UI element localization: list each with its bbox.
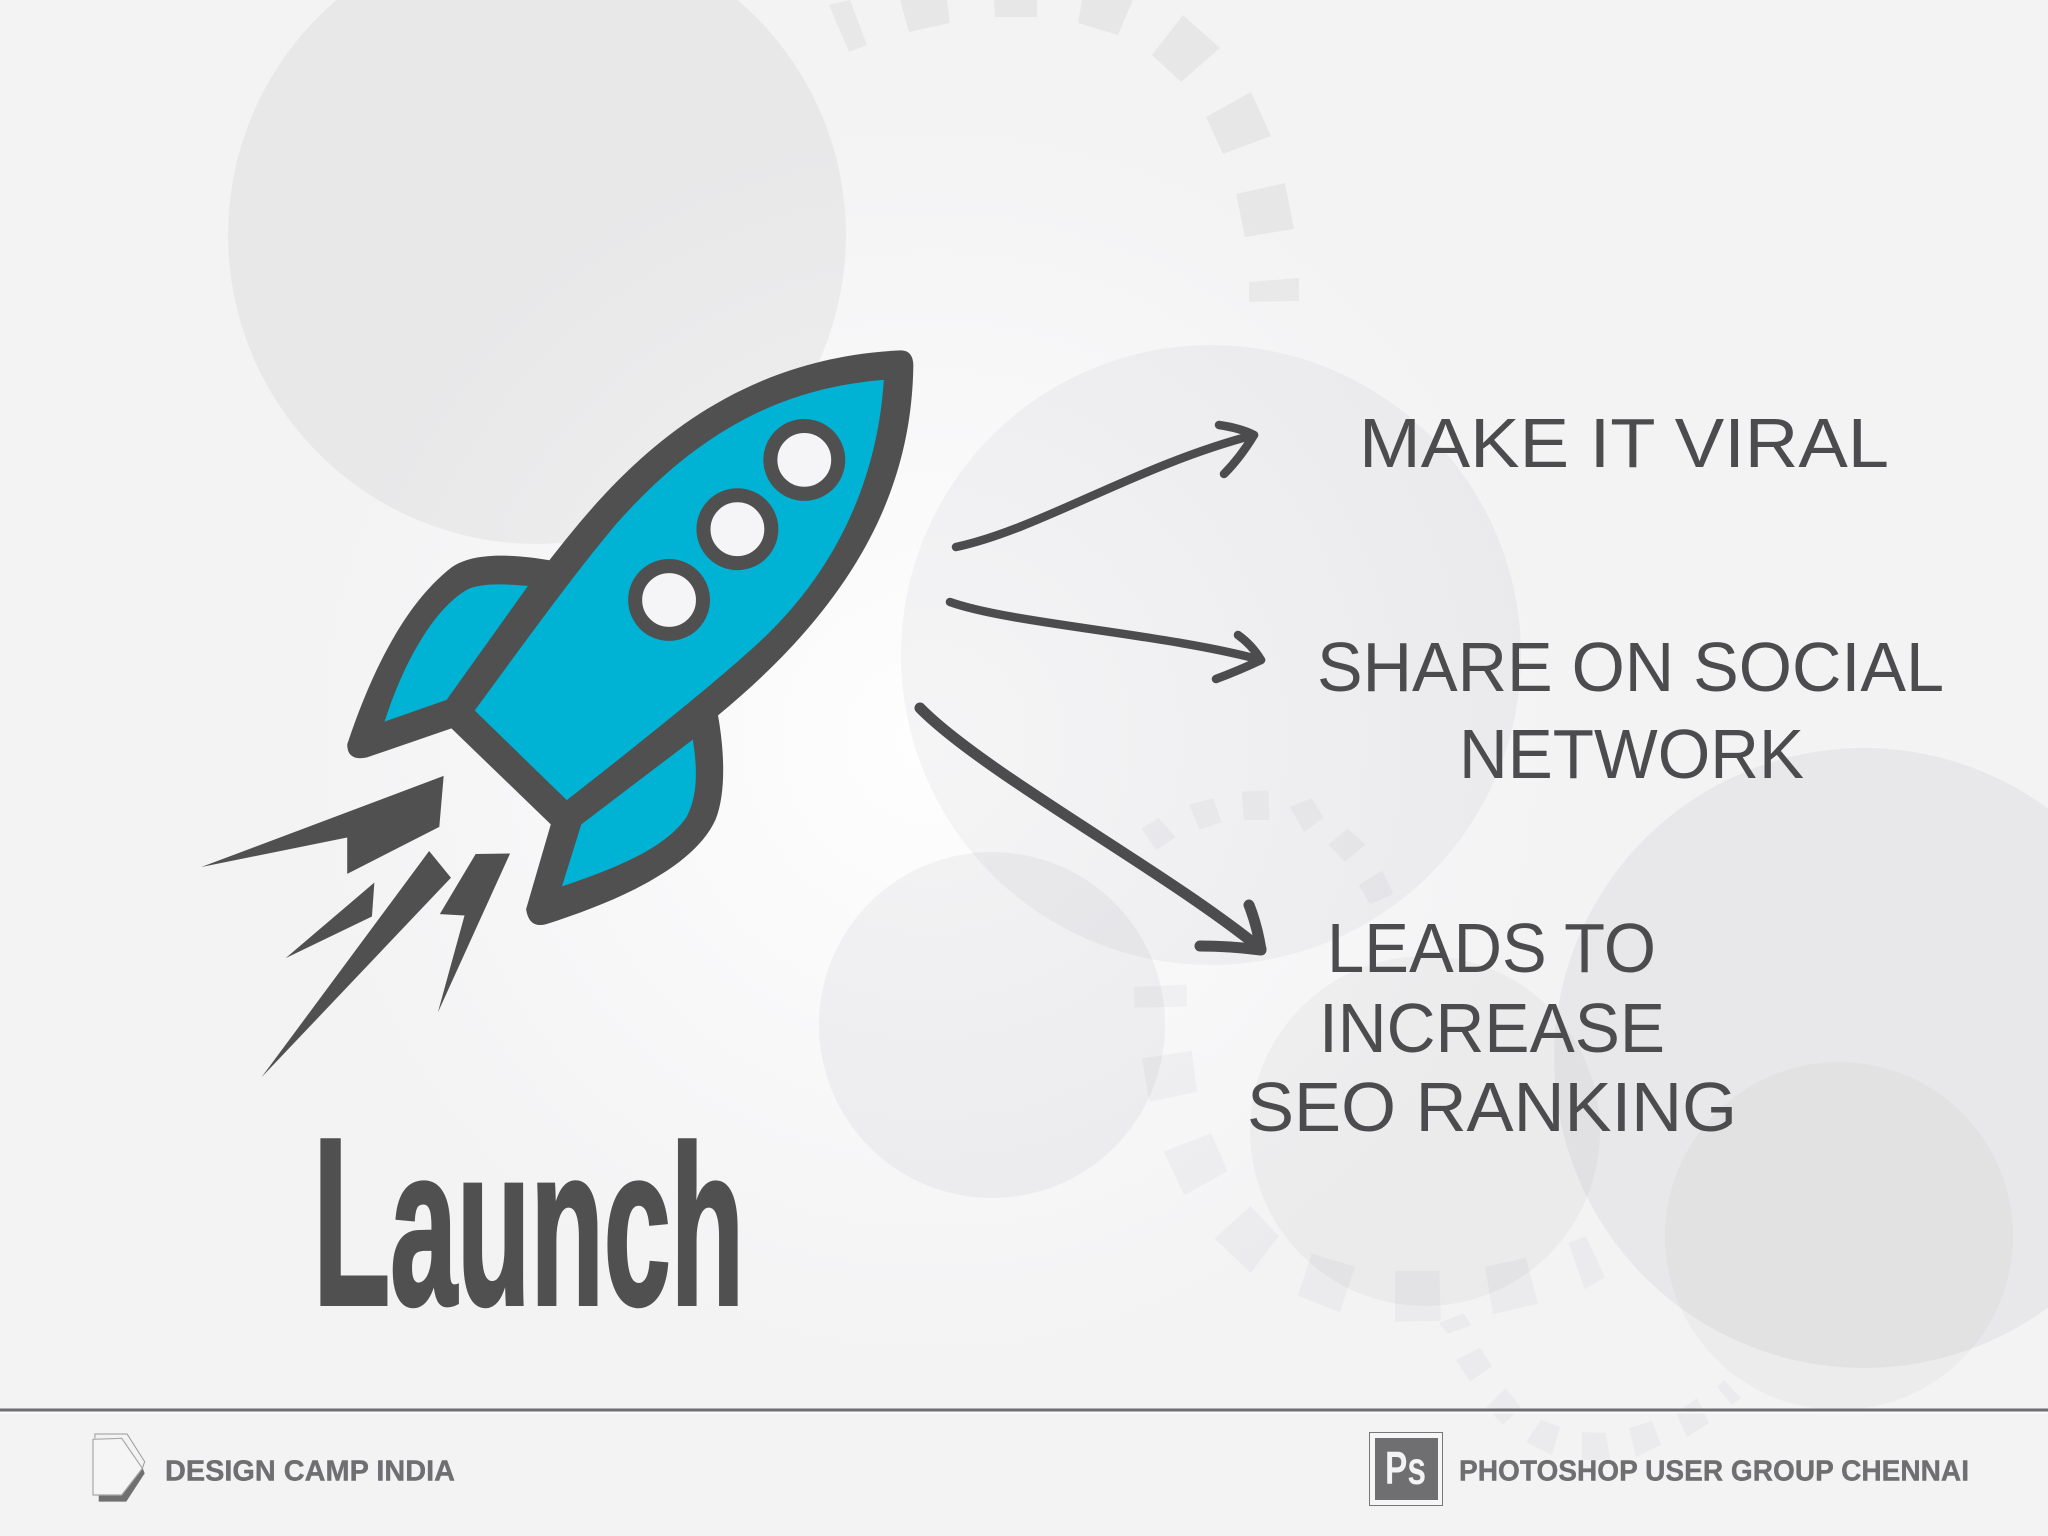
text: leads to increase seo ranking: SEO RANKING [1247,1068,1737,1146]
text: leads to increase seo ranking: INCREASE [1319,989,1665,1067]
rocket body [475,380,884,800]
top dotted ring [829,0,1299,302]
left fin [385,584,528,722]
text: share on social network: NETWORK [1459,715,1804,793]
rocket flames [201,776,510,1077]
rocket windows [635,426,838,634]
footer text: design camp india: DESIGN CAMP INDIA [165,1456,455,1488]
footer text: photoshop user group chennai: PHOTOSHOP USER GROUP CHENNAI [1459,1456,1969,1488]
arrow: share on social network [950,602,1261,679]
icon: photoshop logo: Ps [1385,1442,1426,1494]
text: share on social network: SHARE ON SOCIAL [1317,628,1944,706]
icon: photoshop logo [1370,1432,1442,1506]
arrow: make it viral [956,425,1254,547]
icon: design camp india logo [93,1434,145,1502]
text: share on social network [1317,628,1944,793]
lower dotted ring [1134,790,1741,1460]
title: Launch [313,1090,744,1355]
text: leads to increase seo ranking [1247,909,1737,1146]
arrow: leads to increase seo ranking [920,708,1261,950]
rocket silhouette [347,350,913,925]
text: make it viral: MAKE IT VIRAL [1359,404,1889,482]
icon: rocket [201,350,913,1077]
text: leads to increase seo ranking: LEADS TO [1327,909,1656,987]
right fin [562,740,696,886]
footer divider [0,1408,2048,1414]
